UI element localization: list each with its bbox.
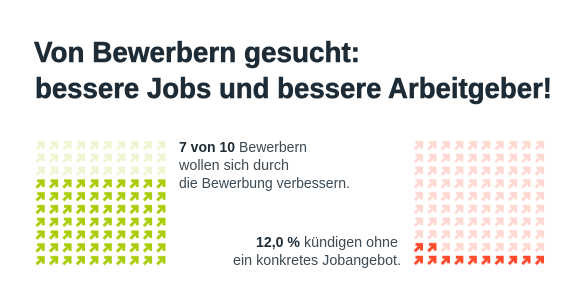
- text block: 12,0 % kündigen: kündigen ohne: [304, 235, 398, 251]
- text block: 7 von 10 Bewerbern: die Bewerbung verbessern.: [179, 176, 350, 192]
- text block: 12,0 % kündigen: ein konkretes Jobangebot.: [233, 253, 401, 269]
- title: Von Bewerbern gesucht:: [34, 37, 360, 69]
- chart: green arrow grid, 7 of 10: [33, 139, 167, 267]
- text block: 7 von 10 Bewerbern: [178, 140, 350, 192]
- text block: 7 von 10 Bewerbern: 7 von 10: [179, 140, 235, 156]
- text block: 12,0 % kündigen: [233, 235, 401, 269]
- chart: red arrow grid, 12 percent: [412, 139, 546, 267]
- text block: 12,0 % kündigen: 12,0 %: [256, 235, 300, 251]
- title: [34, 37, 552, 105]
- text block: 7 von 10 Bewerbern: Bewerbern: [239, 140, 307, 156]
- text block: 7 von 10 Bewerbern: wollen sich durch: [178, 158, 289, 174]
- title: bessere Jobs und bessere Arbeitgeber!: [35, 73, 552, 105]
